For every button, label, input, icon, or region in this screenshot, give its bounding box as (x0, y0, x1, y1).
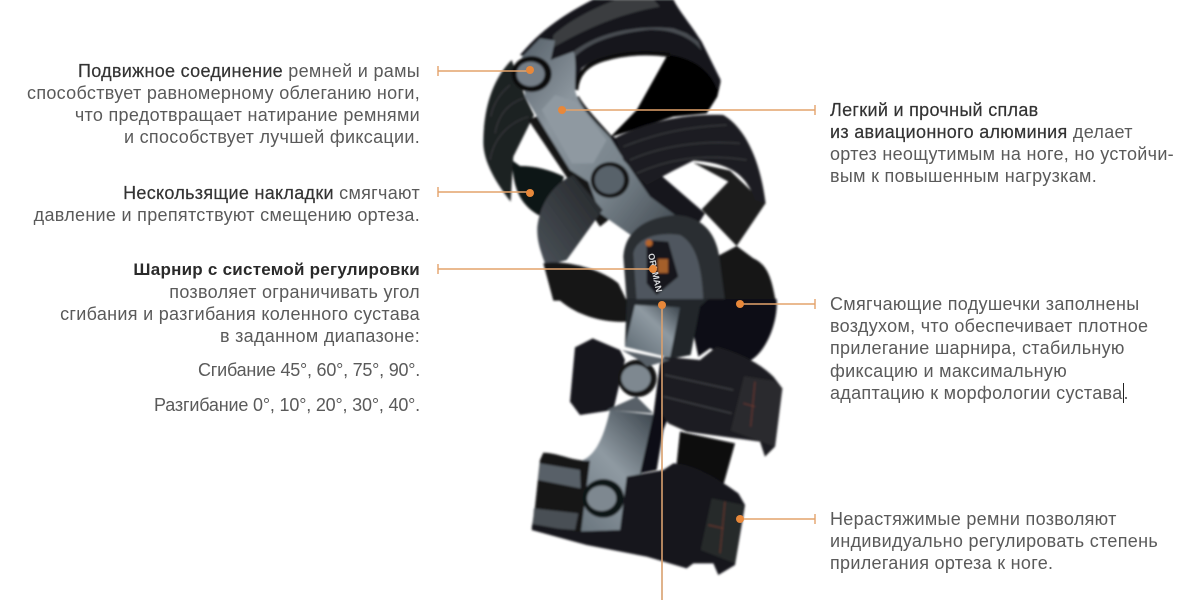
text: air cushions (830, 294, 1148, 403)
small frame flap (607, 350, 670, 413)
text: movable connection (27, 61, 420, 147)
grey strip on cuff (573, 28, 702, 57)
hinge logo text: ORLMAN (646, 252, 664, 293)
air cushion (693, 299, 777, 362)
text: alloy: ортез неощутимым на ноге, но устойчи- (830, 144, 1174, 164)
strap ribs (623, 125, 747, 173)
joint lower (583, 479, 624, 518)
velcro tab upper (731, 376, 782, 447)
back strap (610, 53, 721, 137)
text: air cushions: прилегание шарнира, стабильную (830, 338, 1125, 358)
pad ribs (490, 85, 528, 160)
callout line: alloy frame (558, 105, 815, 115)
hinge base (558, 299, 632, 322)
callout line: strap joint (438, 66, 534, 76)
middle joint (591, 162, 629, 198)
text: movable connection: Подвижное соединение ремней и рамы (78, 61, 420, 81)
right back strap far end (693, 163, 765, 246)
text: movable connection: и способствует лучшей фиксации. (124, 127, 420, 147)
text: air cushions: Смягчающие подушечки заполнены (830, 294, 1139, 314)
text: straps (830, 509, 1158, 573)
text: hinge (60, 260, 420, 346)
text: straps: Нерастяжимые ремни позволяют (830, 509, 1117, 529)
text: straps: индивидуально регулировать степень (830, 531, 1158, 551)
dark diagonal frame edge (528, 115, 617, 227)
text: alloy: из авиационного алюминия делает (830, 122, 1133, 142)
hinge cover (623, 215, 725, 301)
text: alloy: вым к повышенным нагрузкам. (830, 166, 1097, 186)
text: hinge: Шарнир с системой регулировки (133, 260, 420, 279)
callout line: hinge (438, 264, 657, 274)
text: non-slip pads (34, 183, 420, 225)
nonslip pad (512, 160, 564, 216)
callout line: air cushions (736, 299, 815, 309)
upper right band (662, 347, 782, 457)
text: air cushions: адаптацию к морфологии сустава. (830, 383, 1129, 403)
upper left band (570, 338, 625, 415)
grey stripes on lower band (538, 463, 581, 488)
left cuff pad (483, 60, 534, 202)
text: hinge: позволяет ограничивать угол (169, 282, 420, 302)
front right strap (616, 115, 766, 204)
frame dark edge (640, 360, 670, 473)
lower band (532, 453, 590, 540)
lower frame (538, 410, 655, 533)
text: extension values: Разгибание 0°, 10°, 20°, 30°, 40°. (154, 395, 420, 415)
aluminium frame (522, 38, 675, 242)
right lower pad (713, 246, 776, 301)
top cuff band (520, 0, 721, 90)
lower strap (532, 463, 745, 575)
text: movable connection: способствует равномерному облеганию ноги, (27, 83, 420, 103)
text: hinge: сгибания и разгибания коленного сустава (60, 304, 420, 324)
velcro tab lower (701, 498, 743, 563)
knee brace photo (483, 0, 782, 575)
upper frame (625, 305, 680, 357)
hinge plate (633, 234, 703, 301)
callout line: straps (736, 514, 815, 524)
opening rim (576, 53, 670, 90)
frame highlight (542, 95, 607, 163)
text: alloy (830, 100, 1174, 186)
text: straps: прилегания ортеза к ноге. (830, 553, 1053, 573)
text: flexion values: Сгибание 45°, 60°, 75°, 90°. (198, 360, 420, 380)
text: movable connection: что предотвращает натирание ремнями (75, 105, 420, 125)
text: hinge: в заданном диапазоне: (220, 326, 420, 346)
callout line: vertical frame (658, 301, 666, 600)
hinge logo plate (647, 240, 678, 295)
grey upper strip (552, 0, 660, 48)
text: air cushions: воздухом, что обеспечивает плотное (830, 316, 1148, 336)
hinge logo mark (646, 240, 668, 273)
lower part of brace (532, 299, 782, 575)
upper joint (512, 56, 552, 92)
callout line: non-slip pads (438, 187, 534, 197)
joint upper (618, 360, 657, 397)
text: air cushions: фиксацию и максимальную (830, 361, 1067, 381)
upper part of brace (483, 0, 776, 301)
lower left pad (543, 262, 627, 301)
text: alloy: Легкий и прочный сплав (830, 100, 1039, 120)
text: non-slip pads: давление и препятствуют смещению ортеза. (34, 205, 420, 225)
text: non-slip pads: Нескользящие накладки смягчают (123, 183, 420, 203)
lower left strap (537, 175, 603, 266)
lower back strap (677, 432, 735, 485)
